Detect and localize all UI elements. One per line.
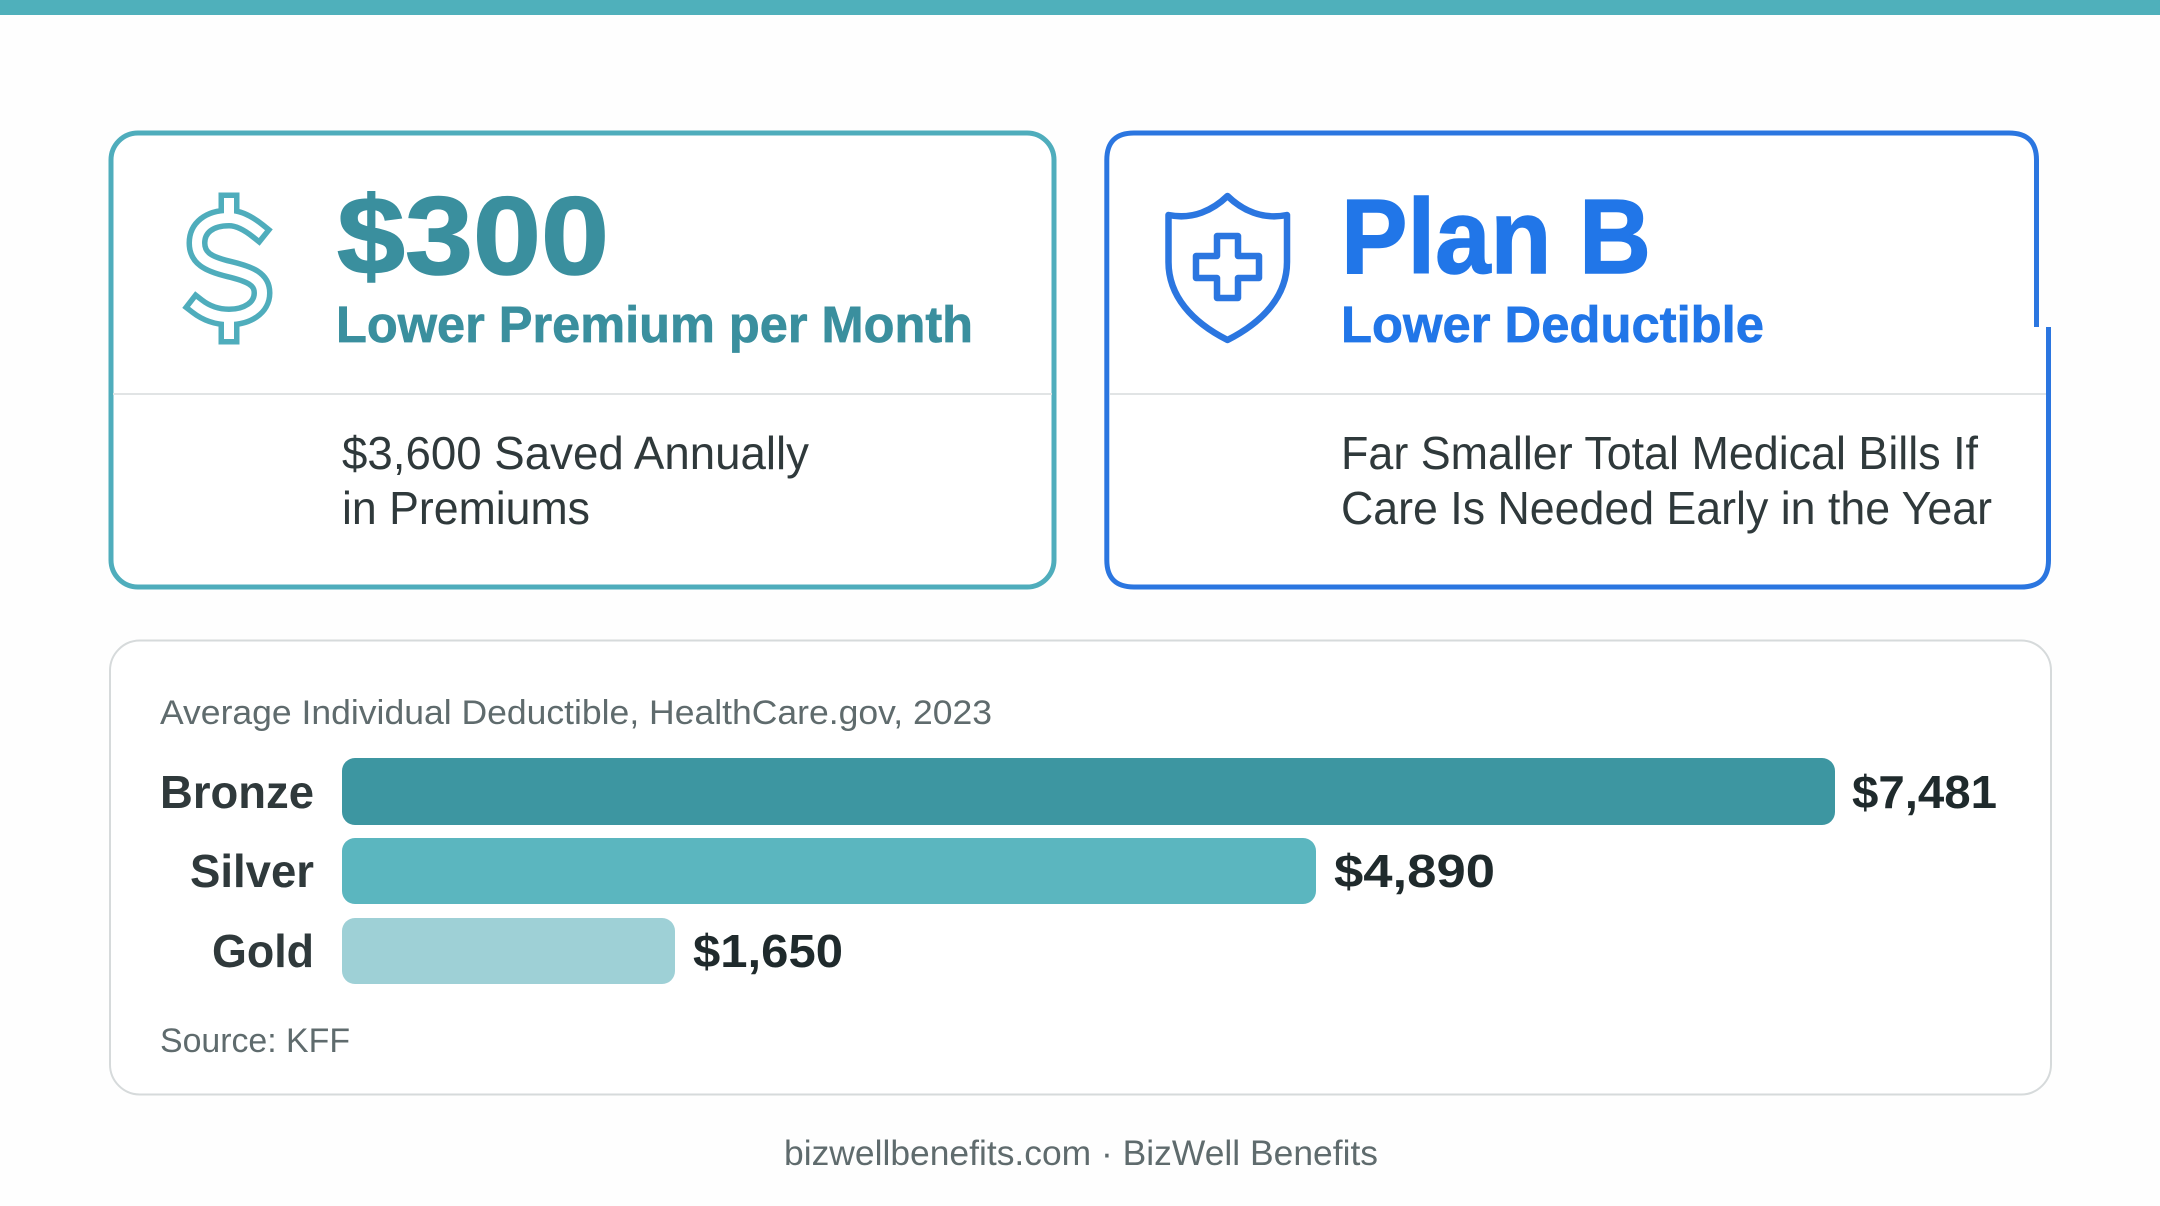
subheading: lower premium per month: Lower Premium per Month xyxy=(336,296,973,353)
subheading: lower deductible: Lower Deductible xyxy=(1341,296,1764,353)
panel: deductible bar chart xyxy=(110,640,2051,1094)
body text: smaller medical bills: Care Is Needed Early in the Year xyxy=(1341,482,1992,534)
chart title: Average Individual Deductible, HealthCare.gov, 2023 xyxy=(160,694,992,732)
card outline with stepped right edge xyxy=(1107,133,2048,587)
bar row: gold: Gold xyxy=(212,925,314,977)
bar row: gold xyxy=(212,918,843,984)
headline: $300: $300 xyxy=(337,175,609,298)
icon: shield with medical cross xyxy=(1168,196,1287,340)
bar row: bronze: Bronze xyxy=(160,766,314,818)
body text: annual savings: in Premiums xyxy=(342,482,590,534)
body text: smaller medical bills: Far Smaller Total Medical Bills If xyxy=(1341,427,1978,479)
bar row: bronze xyxy=(160,758,1997,825)
bar row: silver xyxy=(190,838,1495,904)
body text: annual savings: $3,600 Saved Annually xyxy=(342,427,809,479)
bar row: bronze: $7,481 xyxy=(1852,766,1997,818)
bar row: silver: Silver xyxy=(190,845,314,897)
panel: lower premium card xyxy=(111,133,1054,587)
panel: lower deductible card xyxy=(1107,133,2048,587)
footer: bizwellbenefits.com · BizWell Benefits xyxy=(784,1134,1378,1173)
bar row: silver: $4,890 xyxy=(1334,845,1495,897)
icon: dollar sign xyxy=(197,203,262,334)
source note: Source: KFF xyxy=(160,1022,350,1060)
bar row: gold: $1,650 xyxy=(693,925,843,977)
top accent bar xyxy=(0,0,2160,15)
headline: Plan B: Plan B xyxy=(1341,178,1651,296)
card outline xyxy=(111,133,1054,587)
chart frame xyxy=(110,640,2051,1094)
